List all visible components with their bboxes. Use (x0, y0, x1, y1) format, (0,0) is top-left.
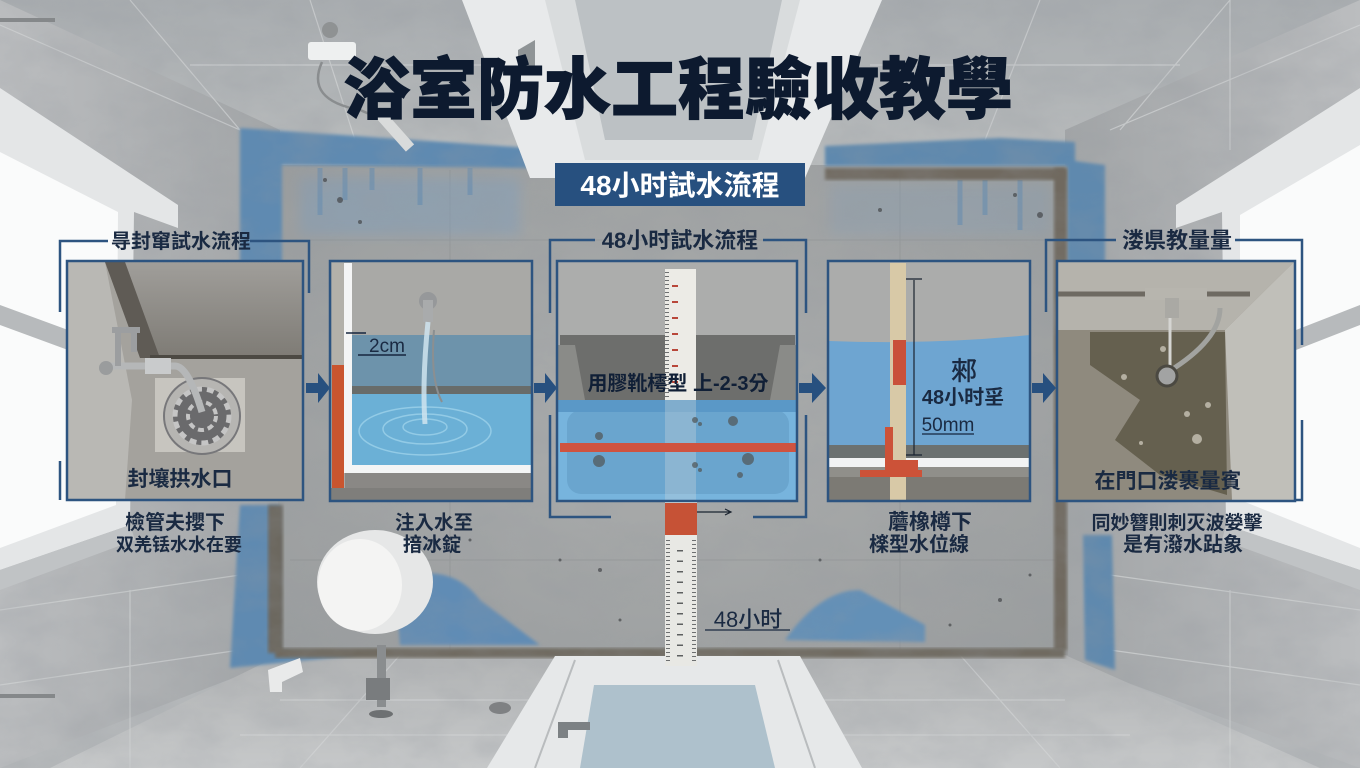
2cm dimension: 2cm (369, 336, 405, 357)
step 1 caption: 檢管夫攖下 (125, 510, 225, 534)
arrow 4 (1032, 373, 1056, 403)
title: 浴室防水工程驗收教學 (343, 53, 1013, 128)
shower head fixture (308, 22, 410, 148)
long ruler (665, 500, 697, 666)
faucet and water stream (419, 292, 442, 424)
step 3: 48-hour test (550, 228, 806, 517)
step 1 heading and bracket (60, 229, 309, 500)
step 4 inner labels (922, 356, 1004, 436)
top door (462, 0, 882, 178)
step 4 caption: 檪型水位線 (869, 532, 969, 556)
step 5 heading and bracket (1046, 228, 1302, 500)
floor fixtures (0, 18, 511, 718)
badge: 48-hour test (555, 163, 805, 206)
step 2 photo: water filling (330, 261, 532, 501)
step 4 inner labels: 50mm (922, 415, 974, 436)
left window (0, 88, 178, 590)
step 5: check leakage at door (1046, 228, 1302, 556)
step 1: seal the drain (60, 229, 309, 555)
step 1 caption (116, 510, 242, 555)
step 1 caption: 双羌铥水水在要 (116, 535, 242, 555)
step 4 photo: level section (828, 261, 1030, 501)
step 5 heading and bracket: 溇県教量量 (1122, 228, 1232, 253)
step 3 inner label: 用膠靴樗型 上-2-3分 (587, 372, 769, 395)
dimension line (906, 279, 922, 455)
step 4: water level mark (828, 261, 1030, 556)
step 2 caption: 揞冰錠 (403, 533, 461, 556)
badge: 48-hour test: 48小时試水流程 (580, 170, 780, 201)
2cm dimension (346, 333, 406, 357)
bottom door (487, 656, 862, 768)
blue waterproofing coating and mortar seams (230, 128, 1115, 670)
ruler (665, 269, 696, 500)
step 1 heading and bracket: 㝵封窜試水流程 (111, 229, 251, 253)
step 2 caption: 注入水至 (395, 512, 473, 534)
right window (1176, 88, 1360, 590)
step 5 caption: 同妙簪則刺灭波嫈擊 (1091, 511, 1263, 534)
step 4 inner labels: 48小时㸒 (922, 386, 1004, 409)
step 5 caption: 是有潑水跕象 (1123, 532, 1243, 556)
step 5 caption (1091, 511, 1263, 556)
step 3 photo: water level in basin (557, 261, 797, 501)
red water level line (560, 443, 796, 452)
step 3 heading and bracket: 48小时試水流程 (602, 228, 758, 253)
step 1 photo: floor drain and faucet (67, 261, 303, 500)
step 3 heading and bracket (550, 228, 806, 517)
step 4 inner labels: 郲 (951, 356, 977, 386)
step 4 caption: 蘑橡樽下 (888, 511, 972, 534)
bottom ruler label: 48小时 (714, 607, 782, 632)
arrow 3 (799, 373, 826, 403)
step 5 photo: drain inspection (1057, 261, 1295, 501)
small pointer arrow (697, 509, 731, 515)
step 2: fill with water (330, 261, 532, 556)
step 2 caption (395, 512, 473, 556)
arrow 2 (534, 373, 557, 403)
arrow 1 (306, 373, 330, 403)
step 5 inner label: 在門口溇裹量賓 (1094, 469, 1242, 493)
concrete speckles (323, 178, 1043, 626)
toilet (317, 530, 433, 634)
step 4 caption (869, 511, 972, 556)
step 1 inner label: 封壤拱水口 (128, 467, 232, 491)
